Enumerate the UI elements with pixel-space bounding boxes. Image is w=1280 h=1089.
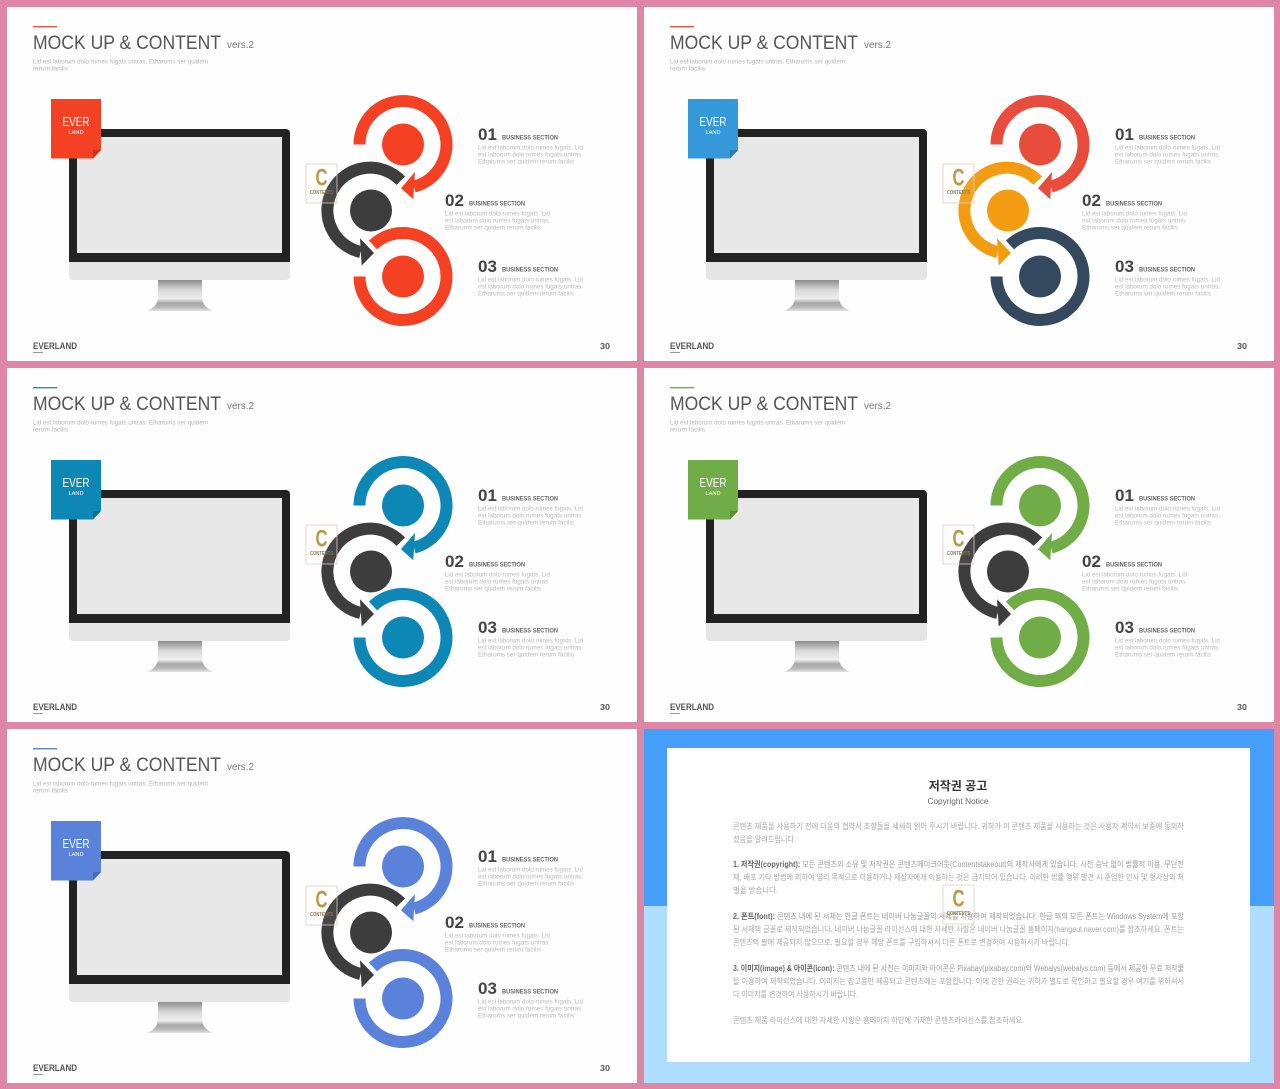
tag: EVER LAND: EVER	[700, 115, 726, 129]
text block: slide 2 subtitle: Lid est laborum dolo rumes fugats untras. Etharums ser quidem	[670, 58, 845, 66]
section 01: est laborum dolo rumes fugats untras.	[478, 874, 583, 880]
footer: EVERLAND	[33, 341, 77, 351]
text block: slide 3 subtitle: Lid est laborum dolo rumes fugats untras. Etharums ser quidem	[33, 420, 208, 426]
footer: 30	[600, 342, 611, 351]
footer	[670, 341, 1248, 353]
watermark logo	[306, 886, 337, 925]
section 03	[1115, 257, 1220, 298]
ring 2 with arrow	[964, 529, 1038, 626]
ring 2 with arrow	[327, 529, 401, 626]
text block: slide 3 subtitle: rerum facilis	[33, 426, 68, 434]
section 02: Etharums ser quidem rerum facilis	[1082, 586, 1178, 592]
section 01: Etharums ser quidem rerum facilis	[478, 158, 574, 166]
text block: slide 1 subtitle: rerum facilis	[33, 66, 68, 72]
section 02	[445, 552, 550, 592]
watermark logo: CONTENTS	[947, 911, 970, 917]
section 02: Lid est laborum dolo rumes fugats. Lid	[1082, 210, 1187, 218]
section 02: Lid est laborum dolo rumes fugats. Lid	[445, 572, 550, 578]
footer: 30	[1237, 703, 1248, 712]
section 01: est laborum dolo rumes fugats untras.	[478, 512, 583, 520]
section 01	[1115, 125, 1220, 166]
section 03: BUSINESS SECTION	[1139, 628, 1195, 634]
text block: slide 1 subtitle	[33, 58, 208, 72]
section 01: BUSINESS SECTION	[1139, 496, 1195, 502]
footer	[670, 702, 1248, 714]
monitor mockup	[706, 490, 927, 672]
heading: slide 3 title: MOCK UP & CONTENT	[33, 393, 221, 415]
section 03: Etharums ser quidem rerum facilis	[1115, 652, 1211, 658]
ring 3	[360, 955, 446, 1042]
footer	[33, 341, 611, 353]
footer: 30	[600, 1064, 611, 1073]
tag: EVER LAND: LAND	[706, 130, 720, 136]
section 02: Lid est laborum dolo rumes fugats. Lid	[445, 932, 550, 940]
text block: slide 5 subtitle	[33, 780, 208, 794]
heading: copyright notice title: 저작권 공고	[929, 778, 987, 793]
section 01	[478, 125, 583, 166]
cycle diagram	[327, 101, 446, 320]
tag: EVER LAND: LAND	[68, 491, 84, 497]
heading: slide 2 title: MOCK UP & CONTENT	[670, 32, 858, 54]
watermark logo: C	[952, 526, 964, 553]
section 03	[1115, 618, 1220, 658]
watermark logo: C	[952, 886, 964, 913]
text block: slide 5 subtitle: rerum facilis	[33, 788, 68, 794]
monitor mockup	[706, 129, 927, 311]
heading: copyright notice title	[928, 778, 989, 806]
text block: image and icon clause: 을 이용하여 제작되었습니다. 이미지는 참고용만 제공되고 콘텐츠에는 포함합니다. 이에 관한 권리는 귀하가 별도로 확인하고 필요할 경우 여기를 위하셔서	[733, 976, 1184, 986]
text block: slide 4 subtitle: Lid est laborum dolo rumes fugats untras. Etharums ser quidem	[670, 420, 845, 426]
section 01: BUSINESS SECTION	[502, 496, 558, 502]
section 02: est laborum dolo rumes fugats untras.	[1082, 578, 1187, 586]
section 02: Etharums ser quidem rerum facilis	[1082, 224, 1178, 232]
text block: intro	[733, 821, 1185, 844]
cycle diagram	[327, 823, 446, 1042]
text block: font clause: 2. 폰트(font): 콘텐츠 내에 된 서체는 한글 폰트는 네이버 나눔글꼴의 서체를 사용하여 제작되었습니다. 한글 외의 모든 폰트는 Windows System에 포함	[733, 911, 1185, 921]
section 02	[1082, 552, 1187, 592]
text block: copyright clause	[733, 859, 1184, 895]
section 03: BUSINESS SECTION	[1139, 266, 1195, 274]
cycle diagram	[964, 101, 1084, 320]
section 02: BUSINESS SECTION	[469, 562, 525, 568]
section 02: Etharums ser quidem rerum facilis	[445, 586, 541, 592]
section 02: Etharums ser quidem rerum facilis	[445, 224, 541, 232]
section 03: 03	[1115, 618, 1134, 637]
watermark logo	[943, 885, 974, 924]
section 03: Etharums ser quidem rerum facilis	[478, 290, 574, 298]
watermark logo: CONTENTS	[947, 190, 970, 196]
text block: intro: 셨음을 알려드립니다.	[733, 834, 796, 844]
tag: EVER LAND: EVER	[700, 476, 726, 490]
watermark logo	[306, 525, 337, 564]
text block: slide 2 subtitle: rerum facilis	[670, 66, 705, 72]
watermark logo: CONTENTS	[310, 551, 333, 557]
heading: slide 1 title: MOCK UP & CONTENT	[33, 32, 221, 54]
watermark logo: CONTENTS	[947, 551, 970, 557]
watermark logo: C	[316, 526, 328, 553]
text block: copyright clause: 재, 배포 기타 방법에 의하여 영리 목적으로 이용하거나 제삼자에게 이용하는 것은 금지되어 있습니다. 이러한 법률 행위 발견 시 준엄한 민사 및 형사상의 처	[733, 872, 1184, 882]
section 01: est laborum dolo rumes fugats untras.	[1115, 512, 1220, 520]
section 01: 01	[1115, 125, 1134, 144]
section 03: BUSINESS SECTION	[502, 988, 558, 996]
tag: EVER LAND: LAND	[68, 130, 84, 136]
section 02: 02	[445, 191, 464, 210]
heading: slide 5 title: vers.2	[227, 761, 254, 773]
section 03: 03	[478, 979, 497, 998]
heading: slide 2 title: vers.2	[864, 39, 891, 51]
watermark logo	[943, 164, 974, 203]
text block: font clause: 된 서체의 글꼴로 제작되었습니다. 네이버 나눔글꼴 라이선스에 대한 자세한 사항은 네이버 나눔글꼴 홈페이지(hangeul.naver.com)를 참조하세요. 폰트는	[733, 924, 1184, 934]
section 03: Lid est laborum dolo rumes fugats. Lid	[1115, 276, 1220, 284]
watermark logo	[306, 164, 337, 203]
ring 3	[360, 233, 446, 320]
section 01: Lid est laborum dolo rumes fugats. Lid	[478, 506, 583, 512]
ring 1 with arrow	[996, 101, 1084, 199]
ring 3	[996, 233, 1084, 320]
tag: EVER LAND: EVER	[62, 115, 90, 129]
section 02: Lid est laborum dolo rumes fugats. Lid	[445, 210, 550, 218]
panel: copyright notice	[644, 729, 1274, 1083]
watermark logo: C	[316, 887, 328, 914]
ring 2 with arrow	[964, 168, 1038, 266]
section 03: est laborum dolo rumes fugats untras.	[1115, 644, 1220, 652]
tag: EVER LAND: EVER	[62, 476, 90, 490]
text block: image and icon clause: 3. 이미지(image) & 아이콘(icon): 콘텐츠 내에 된 사진는 이미지와 아이콘은 Pixabay(pixabay.com)와 Webalys(webalys.com) 등에서 제공한 무료 저작물	[733, 963, 1184, 973]
monitor mockup	[69, 129, 290, 311]
section 01: est laborum dolo rumes fugats untras.	[478, 152, 583, 158]
watermark logo: CONTENTS	[310, 190, 333, 196]
section 02: BUSINESS SECTION	[469, 922, 525, 930]
section 03: Lid est laborum dolo rumes fugats. Lid	[1115, 638, 1220, 644]
section 01: Etharums ser quidem rerum facilis	[1115, 520, 1211, 526]
tag: EVER LAND	[51, 99, 101, 158]
section 01: Lid est laborum dolo rumes fugats. Lid	[1115, 506, 1220, 512]
section 02: est laborum dolo rumes fugats untras.	[1082, 218, 1187, 224]
footer: EVERLAND	[33, 702, 77, 712]
tag: EVER LAND	[688, 99, 738, 158]
cycle diagram	[327, 462, 446, 681]
monitor mockup	[69, 490, 290, 672]
section 03: est laborum dolo rumes fugats untras.	[478, 1006, 583, 1012]
tag: EVER LAND: EVER	[62, 837, 90, 851]
section 03: Etharums ser quidem rerum facilis	[1115, 290, 1211, 298]
ring 2 with arrow	[327, 168, 401, 266]
cycle diagram	[964, 462, 1084, 681]
section 02: BUSINESS SECTION	[1106, 562, 1162, 568]
section 03: BUSINESS SECTION	[502, 628, 558, 634]
section 01: Etharums ser quidem rerum facilis	[478, 520, 574, 526]
section 01	[478, 847, 583, 888]
section 02: Etharums ser quidem rerum facilis	[445, 946, 541, 954]
section 03	[478, 979, 583, 1020]
panel: slide 3 teal	[7, 368, 637, 722]
text block: slide 2 subtitle	[670, 58, 845, 72]
section 02: est laborum dolo rumes fugats untras.	[445, 218, 550, 224]
text block: slide 5 subtitle: Lid est laborum dolo rumes fugats untras. Etharums ser quidem	[33, 780, 208, 788]
tag: EVER LAND	[688, 460, 738, 520]
section 01	[1115, 486, 1220, 526]
section 03	[478, 618, 583, 658]
section 02: est laborum dolo rumes fugats untras.	[445, 940, 550, 946]
section 02	[445, 191, 550, 232]
section 03: Lid est laborum dolo rumes fugats. Lid	[478, 998, 583, 1006]
panel: slide 5 blue	[7, 729, 637, 1083]
monitor mockup	[69, 851, 290, 1033]
heading: slide 5 title: MOCK UP & CONTENT	[33, 754, 221, 776]
section 01: Etharums ser quidem rerum facilis	[478, 880, 574, 888]
watermark logo	[943, 525, 974, 564]
section 01: 01	[1115, 486, 1134, 505]
text block: font clause: 콘텐츠의 팔에 제공되지 않으므로, 필요할 경우 해당 폰트를 구입하셔서 다른 폰트로 변경하여 사용하시기 바랍니다.	[733, 937, 1070, 947]
text block: font clause	[733, 911, 1185, 947]
section 01: Lid est laborum dolo rumes fugats. Lid	[1115, 144, 1220, 152]
section 02: Lid est laborum dolo rumes fugats. Lid	[1082, 572, 1187, 578]
ring 3	[360, 594, 446, 681]
section 01: 01	[478, 847, 497, 866]
tag: EVER LAND: LAND	[68, 852, 84, 858]
section 01: BUSINESS SECTION	[1139, 134, 1195, 142]
section 01: BUSINESS SECTION	[502, 856, 558, 864]
watermark logo: C	[952, 165, 964, 192]
section 03: Etharums ser quidem rerum facilis	[478, 1012, 574, 1020]
footer	[33, 702, 611, 714]
tag: EVER LAND	[51, 460, 101, 520]
ring 2 with arrow	[327, 890, 401, 988]
section 01: 01	[478, 125, 497, 144]
section 03: 03	[478, 618, 497, 637]
panel: slide 1 red	[7, 7, 637, 361]
section 03: 03	[478, 257, 497, 276]
text block: copyright clause: 벌을 받습니다.	[733, 885, 778, 895]
section 02: 02	[1082, 191, 1101, 210]
section 02	[445, 913, 550, 954]
footer: EVERLAND	[33, 1063, 77, 1073]
section 02: 02	[1082, 552, 1101, 571]
section 03: Lid est laborum dolo rumes fugats. Lid	[478, 638, 583, 644]
heading: slide 4 title: vers.2	[864, 400, 891, 412]
ring 1 with arrow	[360, 462, 446, 560]
heading: slide 4 title: MOCK UP & CONTENT	[670, 393, 858, 415]
section 01: est laborum dolo rumes fugats untras.	[1115, 152, 1220, 158]
text block: slide 4 subtitle: rerum facilis	[670, 426, 705, 434]
text block: closing note: 콘텐츠 제품 라이선스에 대한 자세한 사항은 홈페이지 하단에 기재한 콘텐츠라이선스를 참조하세요.	[733, 1015, 1024, 1025]
section 01: Etharums ser quidem rerum facilis	[1115, 158, 1211, 166]
section 01: 01	[478, 486, 497, 505]
footer	[33, 1063, 611, 1075]
footer: EVERLAND	[670, 341, 714, 351]
section 02: BUSINESS SECTION	[1106, 200, 1162, 208]
footer: EVERLAND	[670, 702, 714, 712]
text block: image and icon clause	[733, 963, 1184, 999]
section 03: est laborum dolo rumes fugats untras.	[1115, 284, 1220, 290]
section 01: BUSINESS SECTION	[502, 134, 558, 142]
heading: slide 1 title: vers.2	[227, 39, 254, 51]
section 02: 02	[445, 552, 464, 571]
ring 1 with arrow	[360, 101, 446, 199]
tag: EVER LAND: LAND	[706, 491, 720, 497]
text block: image and icon clause: 다 이미지를 변경하여 사용하시기 바랍니다.	[733, 989, 858, 999]
section 02: BUSINESS SECTION	[469, 200, 525, 208]
heading: slide 3 title: vers.2	[227, 400, 254, 412]
section 03: 03	[1115, 257, 1134, 276]
footer: 30	[1237, 342, 1248, 351]
panel: slide 4 green	[644, 368, 1274, 722]
section 03: Etharums ser quidem rerum facilis	[478, 652, 574, 658]
ring 3	[996, 594, 1084, 681]
section 03: Lid est laborum dolo rumes fugats. Lid	[478, 276, 583, 284]
text block: slide 4 subtitle	[670, 420, 845, 434]
ring 1 with arrow	[360, 823, 446, 921]
section 03: est laborum dolo rumes fugats untras.	[478, 644, 583, 652]
section 02	[1082, 191, 1187, 232]
section 01: Lid est laborum dolo rumes fugats. Lid	[478, 144, 583, 152]
watermark logo: C	[316, 165, 328, 192]
text block: intro: 콘텐츠 제품을 사용하기 전에 다음의 협약서 조항들을 세세히 읽어 주시기 바랍니다. 귀하가 이 콘텐츠 제품을 사용하는 것은 사용자 계약서 보증에 동의하	[733, 821, 1185, 831]
tag: EVER LAND	[51, 821, 101, 880]
section 03: BUSINESS SECTION	[502, 266, 558, 274]
text block: slide 3 subtitle	[33, 420, 208, 434]
section 01	[478, 486, 583, 526]
section 01: Lid est laborum dolo rumes fugats. Lid	[478, 866, 583, 874]
heading: copyright notice title: Copyright Notice	[928, 797, 989, 806]
footer: 30	[600, 703, 611, 712]
section 02: 02	[445, 913, 464, 932]
text block: copyright clause: 1. 저작권(copyright): 모든 콘텐츠의 소유 및 저작권은 콘텐츠메이크어웃(Contentstakeout)의 제작사에게 있습니다. 사전 승낙 없이 법률적 이용, 무단전	[733, 859, 1184, 869]
ring 1 with arrow	[996, 462, 1084, 560]
panel: slide 2 multicolor	[644, 7, 1274, 361]
section 03: est laborum dolo rumes fugats untras.	[478, 284, 583, 290]
section 03	[478, 257, 583, 298]
watermark logo: CONTENTS	[310, 912, 333, 918]
text block: slide 1 subtitle: Lid est laborum dolo rumes fugats untras. Etharums ser quidem	[33, 58, 208, 66]
section 02: est laborum dolo rumes fugats untras.	[445, 578, 550, 586]
